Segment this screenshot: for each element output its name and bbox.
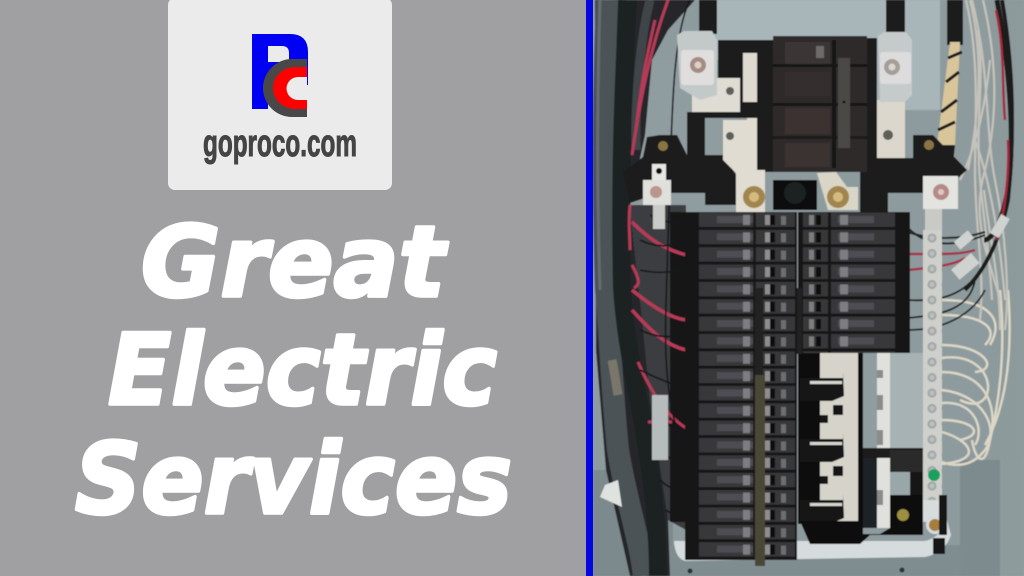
- icon: PC logo: [252, 34, 308, 117]
- left wiring shadow: [630, 205, 686, 530]
- strap over knob box: [817, 172, 858, 210]
- black mounting frame: right arm: [860, 38, 967, 212]
- circuit breakers right column: [798, 212, 910, 353]
- side lug right: [923, 176, 958, 209]
- logo text: goproco.com: [203, 123, 357, 165]
- wire connector tags: [951, 214, 1010, 280]
- right bundle of white wires: [942, 290, 1010, 465]
- photo: electrical panel: [593, 0, 1024, 576]
- taped neutral cable: [937, 0, 963, 175]
- white slip of paper: [600, 480, 622, 507]
- title: Services: [75, 423, 512, 537]
- right dark and red wires: [908, 0, 1012, 330]
- right lug: [877, 32, 912, 158]
- blue divider: [586, 0, 593, 576]
- main breaker: [773, 36, 867, 172]
- logo card: [168, 0, 392, 190]
- black mounting frame: left arm: [623, 135, 743, 205]
- top feed cables: [699, 0, 905, 34]
- exposed bus stabs: [798, 352, 923, 544]
- left cables: [598, 0, 658, 576]
- left lug: [677, 31, 757, 112]
- side lug left: [643, 164, 671, 229]
- left red wires: [629, 0, 690, 428]
- left background panel: [0, 0, 586, 576]
- left ground bar: [652, 395, 668, 460]
- bottom white bracket: [674, 520, 951, 561]
- title: Electric: [108, 314, 497, 428]
- brass lugs: [658, 140, 934, 208]
- title: Great: [141, 206, 448, 320]
- circuit breakers left column: [685, 212, 797, 560]
- left thin wires: [640, 0, 690, 520]
- panel backplate: [593, 0, 1024, 576]
- neutral bus bar: [921, 209, 947, 554]
- handle tie bars: [755, 288, 802, 566]
- left dark cable mass: [595, 0, 695, 576]
- title: [75, 206, 512, 537]
- mounting screws: [688, 568, 904, 574]
- breaker tie bar: [838, 58, 850, 148]
- meter knob: [773, 180, 817, 210]
- center bus tabs: [723, 118, 765, 212]
- black mounting frame: upper: [687, 40, 773, 193]
